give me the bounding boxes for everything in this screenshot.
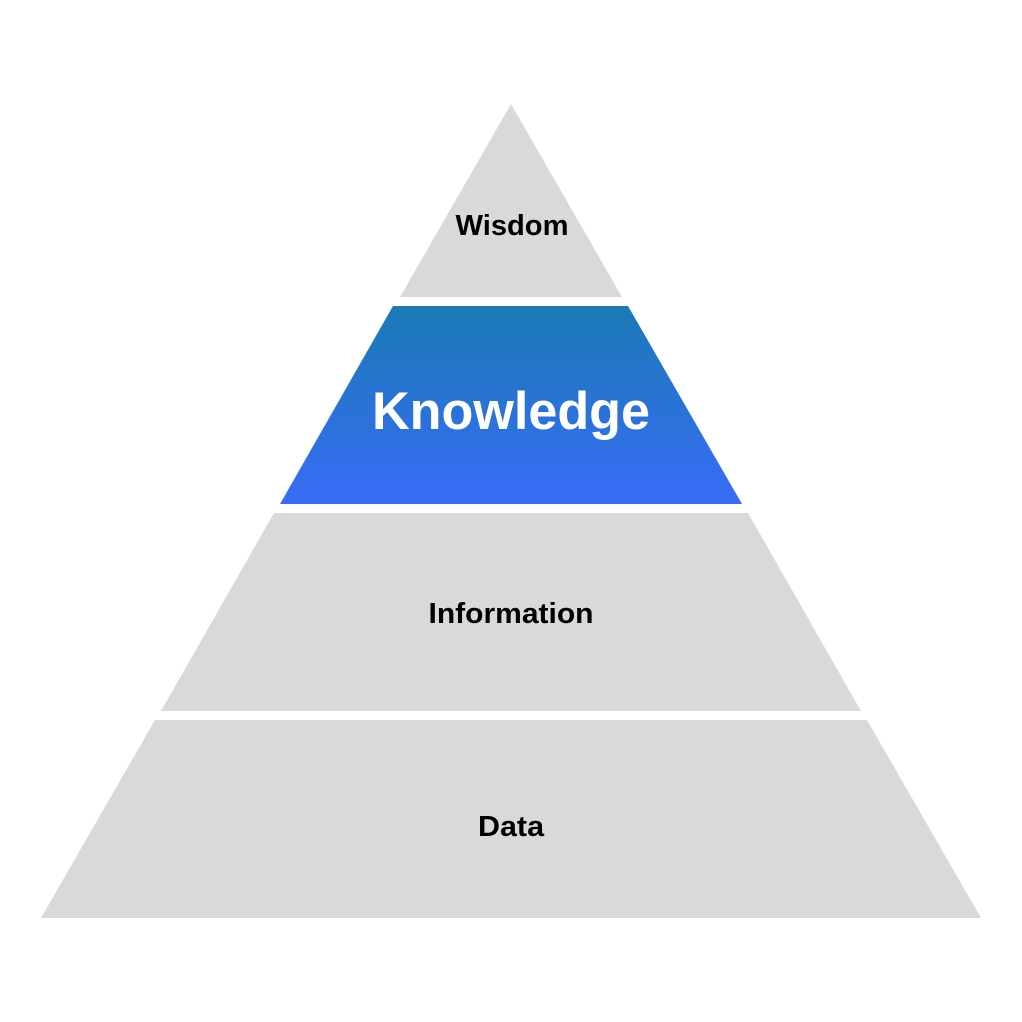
tier: Data: Data: [478, 811, 545, 843]
tier: Information: Information: [428, 598, 594, 630]
tier: Wisdom: Wisdom: [456, 210, 568, 242]
tier: Knowledge: Knowledge: [372, 382, 650, 441]
tier: Wisdom: [400, 104, 622, 297]
tier: Knowledge: [280, 306, 742, 504]
tier: Information: [161, 513, 861, 711]
tier: Data: [41, 720, 981, 918]
